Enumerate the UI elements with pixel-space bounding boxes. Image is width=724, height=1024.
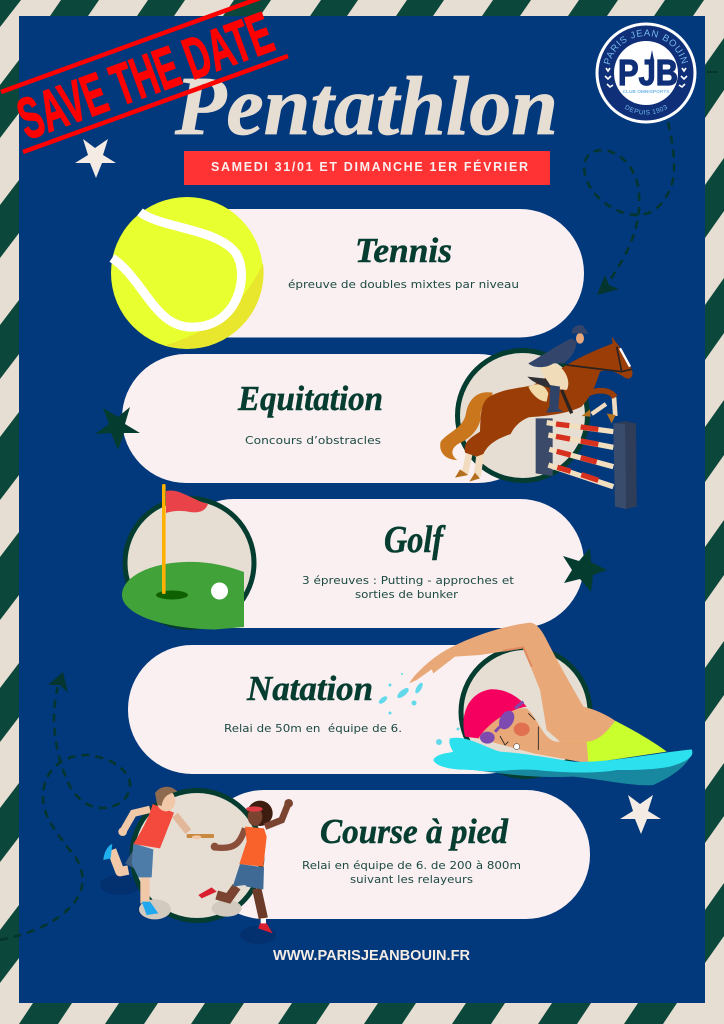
text: golf xyxy=(302,574,515,601)
logo PJB: CLUB OMNISPORTS xyxy=(623,89,670,95)
heading: course a pied: Course à pied xyxy=(320,812,508,851)
panel: course a pied xyxy=(100,787,590,944)
icon: horse jump xyxy=(440,325,637,509)
heading: golf: Golf xyxy=(384,519,446,561)
icon: tennis ball xyxy=(111,197,264,349)
logo PJB: PJB xyxy=(618,52,678,93)
logo PJB xyxy=(596,22,696,124)
star: bottom right xyxy=(620,795,661,834)
stamp: save the date xyxy=(1,0,288,152)
text: natation: Relai de 50m en équipe de 6. xyxy=(224,722,402,735)
text: course a pied: Relai en équipe de 6. de 200 à 800m xyxy=(302,859,521,872)
date banner: SAMEDI 31/01 ET DIMANCHE 1ER FÉVRIER xyxy=(211,159,528,174)
text: golf: 3 épreuves : Putting - approches et xyxy=(302,574,515,587)
logo PJB: DEPUIS 1903 xyxy=(624,104,668,115)
icon: golf green and flag xyxy=(122,484,254,630)
title: Pentathlon xyxy=(174,60,558,153)
heading: natation: Natation xyxy=(246,669,373,708)
text: course a pied: suivant les relayeurs xyxy=(350,873,473,886)
dashed path top right with arrow xyxy=(584,72,718,295)
star: top left xyxy=(75,139,116,178)
panel: tennis xyxy=(111,197,584,349)
icon: swimmer xyxy=(378,623,692,785)
heading: tennis: Tennis xyxy=(355,231,452,270)
logo PJB: PARIS JEAN BOUIN xyxy=(604,29,688,64)
icon: relay runners xyxy=(100,787,293,944)
panel: natation xyxy=(128,623,692,785)
heading: equitation: Equitation xyxy=(237,379,383,418)
dashed path bottom left with arrow xyxy=(0,672,130,940)
text: golf: sorties de bunker xyxy=(355,588,459,601)
text: tennis: épreuve de doubles mixtes par niveau xyxy=(288,278,519,291)
icon: green star xyxy=(563,548,607,592)
website link text: WWW.PARISJEANBOUIN.FR xyxy=(273,948,471,964)
text: course a pied xyxy=(302,859,521,886)
panel: equitation xyxy=(95,325,637,509)
text: equitation: Concours d’obstracles xyxy=(245,434,381,447)
icon: green star xyxy=(95,407,140,450)
panel: golf xyxy=(122,484,607,630)
date banner xyxy=(184,151,550,185)
